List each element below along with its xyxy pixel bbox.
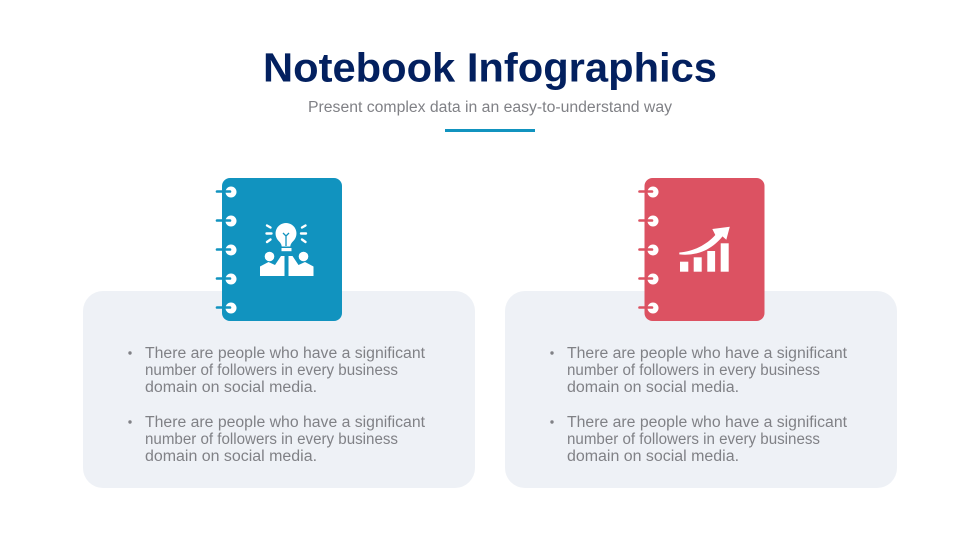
blue notebook xyxy=(217,178,342,321)
right bullet list: number of followers in every business xyxy=(567,431,820,448)
panel: right text card xyxy=(505,291,897,488)
right bullet list xyxy=(550,345,848,465)
right bullet list: There are people who have a significant xyxy=(567,345,848,362)
panel: left text card xyxy=(83,291,475,488)
notebook spiral rings xyxy=(217,186,236,314)
right bullet list: number of followers in every business xyxy=(567,362,820,379)
left bullet list: number of followers in every business xyxy=(145,431,398,448)
right bullet list: domain on social media. xyxy=(567,448,739,465)
subtitle: Present complex data in an easy-to-understand way xyxy=(308,99,672,116)
title: Notebook Infographics xyxy=(263,44,717,90)
right bullet list: domain on social media. xyxy=(567,379,739,396)
notebook spiral rings xyxy=(640,186,658,314)
left bullet list xyxy=(128,345,426,465)
icon: rising bar chart with arrow xyxy=(679,227,730,272)
left bullet list: There are people who have a significant xyxy=(145,345,426,362)
left bullet list: domain on social media. xyxy=(145,448,317,465)
title underline xyxy=(445,129,535,132)
right bullet list: There are people who have a significant xyxy=(567,414,848,431)
left bullet list: domain on social media. xyxy=(145,379,317,396)
left bullet list: There are people who have a significant xyxy=(145,414,426,431)
red notebook xyxy=(640,178,764,321)
left bullet list: number of followers in every business xyxy=(145,362,398,379)
icon: light bulb with two people xyxy=(260,223,314,276)
